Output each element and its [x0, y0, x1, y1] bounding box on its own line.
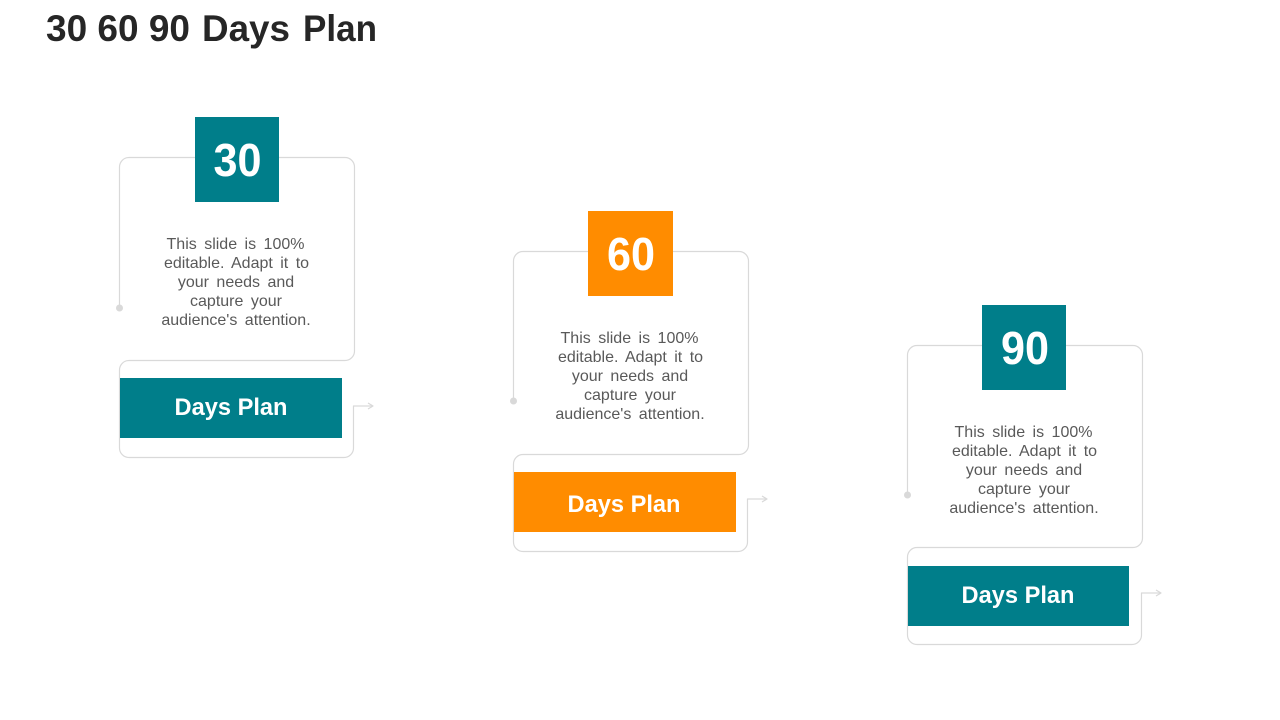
panel: 90 days — [904, 305, 1161, 644]
connector dot 60 — [510, 398, 517, 404]
body text 30: capture your — [190, 293, 283, 310]
label bar 90 — [908, 566, 1129, 626]
title: Plan — [303, 8, 377, 49]
title: 30 60 90 — [46, 8, 190, 49]
number box 60: 60 — [607, 228, 655, 280]
connector dot 90 — [904, 492, 911, 498]
body text 60: This slide is 100% — [561, 330, 698, 347]
panel: 30 days — [116, 117, 373, 458]
body text 30: audience's attention. — [161, 312, 311, 329]
connector dot 30 — [116, 304, 123, 312]
arrow 90 — [1156, 590, 1161, 596]
body text 90: editable. Adapt it to — [952, 443, 1097, 460]
body text 90: This slide is 100% — [955, 424, 1092, 441]
body text 30: editable. Adapt it to — [164, 255, 309, 272]
title — [46, 8, 377, 49]
label bar 60 — [514, 472, 736, 532]
body text 30: This slide is 100% — [167, 236, 304, 253]
card outline 90 — [908, 346, 1160, 644]
arrow 60 — [762, 496, 767, 502]
body text 30 — [161, 236, 311, 329]
number box 90: 90 — [1001, 322, 1049, 374]
label bar 90: Days Plan — [962, 582, 1074, 609]
card outline 30 — [120, 158, 372, 458]
body text 90: capture your — [978, 481, 1071, 498]
arrow 30 — [368, 403, 373, 409]
number box 60 — [588, 211, 673, 296]
body text 90 — [949, 424, 1099, 517]
body text 90: your needs and — [966, 462, 1082, 479]
label bar 30: Days Plan — [174, 394, 288, 421]
body text 30: your needs and — [178, 274, 294, 291]
body text 60: capture your — [584, 387, 677, 404]
number box 90 — [982, 305, 1066, 390]
panel: 60 days — [510, 211, 767, 552]
number box 30: 30 — [214, 134, 262, 186]
body text 90: audience's attention. — [949, 500, 1099, 517]
title: Days — [202, 8, 290, 49]
card outline 60 — [514, 252, 766, 552]
label bar 60: Days Plan — [568, 491, 680, 518]
body text 60 — [555, 330, 705, 423]
body text 60: your needs and — [572, 368, 688, 385]
body text 60: editable. Adapt it to — [558, 349, 703, 366]
number box 30 — [195, 117, 279, 202]
label bar 30 — [120, 378, 342, 438]
body text 60: audience's attention. — [555, 406, 705, 423]
